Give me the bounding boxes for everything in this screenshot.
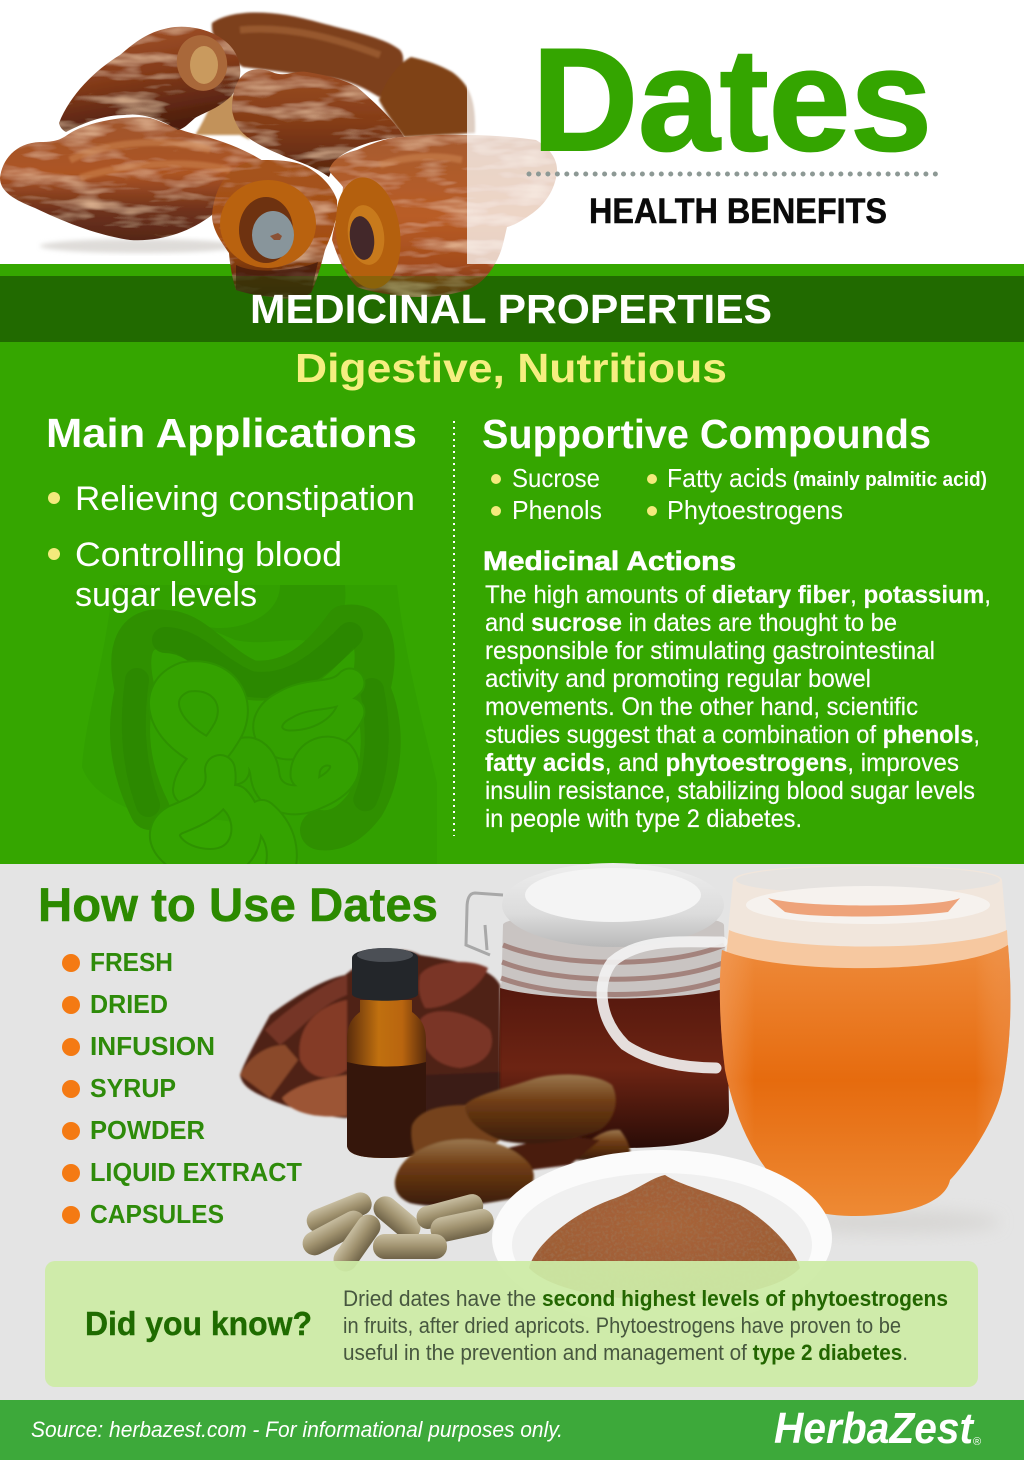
bullet: controlling blood sugar levels: sugar levels bbox=[75, 576, 257, 614]
large intestine bbox=[130, 624, 381, 830]
bullet: controlling blood sugar levels: Controlling blood bbox=[75, 536, 342, 574]
text block: medicinal actions: studies suggest that a combination of phenols, bbox=[485, 721, 980, 749]
jar glass ridges bbox=[501, 945, 726, 994]
callout text: useful in the prevention and management of type 2 diabetes. bbox=[343, 1340, 908, 1365]
text block: medicinal actions: activity and promoting regular bowel bbox=[485, 665, 871, 693]
bottle black cap bbox=[352, 948, 418, 1001]
centre date bbox=[232, 69, 404, 177]
callout text: Dried dates have the second highest levels of phytoestrogens bbox=[343, 1286, 948, 1311]
text block: medicinal actions: insulin resistance, stabilizing blood sugar levels bbox=[485, 777, 975, 805]
back dates (soft focus) bbox=[195, 12, 475, 140]
text block: medicinal actions: fatty acids, and phytoestrogens, improves bbox=[485, 749, 959, 777]
text block: medicinal actions: in people with type 2 diabetes. bbox=[485, 805, 802, 833]
date seed hole bbox=[190, 46, 218, 84]
cap top highlight bbox=[357, 948, 413, 962]
dark translucent band over lower dates bbox=[0, 276, 1024, 342]
table shadows bbox=[780, 1210, 1000, 1234]
callout heading: Did you know? bbox=[85, 1305, 312, 1342]
tea surface bbox=[746, 886, 990, 924]
heading: medicinal actions: Medicinal Actions bbox=[483, 546, 736, 576]
photo: pile of dates bbox=[0, 0, 1024, 342]
highlight on date skin bbox=[70, 143, 462, 178]
front date cavity bbox=[239, 197, 293, 263]
bullet: relieving constipation: Relieving constipation bbox=[75, 480, 415, 518]
text block: medicinal actions bbox=[485, 581, 991, 833]
green medicinal section background bbox=[0, 264, 1024, 864]
torso silhouette bbox=[82, 585, 437, 864]
item: syrup: SYRUP bbox=[90, 1073, 176, 1103]
item: infusion: INFUSION bbox=[90, 1031, 215, 1061]
right cut date bbox=[329, 135, 557, 297]
lower dark core of front date bbox=[236, 262, 318, 297]
list: forms of use bbox=[62, 947, 302, 1229]
right date seed bbox=[344, 203, 388, 267]
amber extract bottle bbox=[347, 948, 426, 1158]
dried date pile bbox=[240, 950, 500, 1120]
text block: medicinal actions: The high amounts of dietary fiber, potassium, bbox=[485, 581, 991, 609]
heading: how to use dates: How to Use Dates bbox=[38, 878, 438, 931]
cut end of upper date bbox=[171, 29, 233, 97]
bowl inner shade bbox=[512, 1173, 812, 1317]
text block: medicinal actions: responsible for stimulating gastrointestinal bbox=[485, 637, 935, 665]
source note: Source: herbazest.com - For informational purposes only. bbox=[31, 1417, 563, 1442]
syrup jar bbox=[466, 863, 729, 1148]
text block: medicinal actions: movements. On the other hand, scientific bbox=[485, 693, 918, 721]
bottle dark liquid bbox=[347, 1062, 426, 1158]
cut face of right date bbox=[329, 173, 407, 293]
column divider bbox=[453, 421, 455, 836]
title: Dates: Dates bbox=[532, 18, 932, 181]
compound: fatty acids: Fatty acids bbox=[667, 463, 787, 493]
front cut date bbox=[212, 160, 337, 299]
list: main applications bbox=[48, 480, 415, 614]
compound: sucrose: Sucrose bbox=[512, 463, 600, 493]
text block: medicinal actions: and sucrose in dates are thought to be bbox=[485, 609, 897, 637]
subheading: digestive, nutritious: Digestive, Nutritious bbox=[295, 345, 727, 391]
glass upper wall bbox=[726, 865, 1008, 950]
glass rim opening bbox=[736, 866, 1000, 894]
whole dates beside jar bbox=[395, 1075, 631, 1206]
bottle body bbox=[347, 1000, 426, 1158]
tea body bbox=[720, 945, 1010, 1216]
subtitle: health benefits: HEALTH BENEFITS bbox=[589, 192, 887, 231]
white fade panel over right of dates bbox=[467, 0, 567, 264]
powder mound bbox=[529, 1175, 800, 1300]
logo: HerbaZest: ® bbox=[973, 1436, 981, 1448]
item: powder: POWDER bbox=[90, 1115, 205, 1145]
bullet: controlling blood sugar levels bbox=[48, 536, 342, 614]
dotted title divider bbox=[529, 172, 936, 176]
callout text bbox=[343, 1286, 948, 1365]
capsules bbox=[298, 1189, 496, 1276]
callout background bbox=[45, 1261, 978, 1387]
bowl of date powder bbox=[492, 1150, 832, 1326]
tea side glow bbox=[720, 945, 1010, 1216]
front date grey seed bbox=[252, 211, 294, 259]
small intestine loops bbox=[164, 676, 350, 870]
jar syrup bbox=[498, 988, 729, 1148]
logo: HerbaZest: HerbaZest bbox=[774, 1404, 975, 1453]
shadow under dates bbox=[40, 239, 240, 253]
compound: phenols: Phenols bbox=[512, 495, 602, 525]
footer bar bbox=[0, 1400, 1024, 1460]
glass peach band bbox=[724, 930, 1010, 975]
item: capsules: CAPSULES bbox=[90, 1199, 224, 1229]
illustration: intestines in torso bbox=[110, 585, 401, 864]
compound: phytoestrogens: Phytoestrogens bbox=[667, 495, 843, 525]
compound: fatty acids bbox=[647, 463, 987, 493]
large left date bbox=[0, 117, 275, 240]
footer background bbox=[0, 1400, 1024, 1460]
dark green heading band bbox=[0, 276, 1024, 342]
tea surface tint bbox=[768, 898, 960, 916]
jar lid highlight bbox=[525, 868, 701, 922]
heading: medicinal properties: MEDICINAL PROPERTIES bbox=[250, 286, 772, 332]
list: supportive compounds bbox=[491, 463, 987, 525]
jar lid bbox=[502, 863, 724, 947]
stomach shape bbox=[200, 585, 345, 642]
glass of date infusion bbox=[602, 865, 1010, 1216]
item: liquid extract: LIQUID EXTRACT bbox=[90, 1157, 302, 1187]
upper left date bbox=[59, 27, 240, 132]
heading: main applications: Main Applications bbox=[46, 410, 417, 456]
gray usage section background bbox=[0, 864, 1024, 1400]
heading: supportive compounds: Supportive Compounds bbox=[482, 411, 931, 457]
white header background bbox=[0, 0, 1024, 264]
jar clamp wire bbox=[466, 893, 503, 955]
panel: did you know bbox=[45, 1261, 978, 1387]
glass handle bbox=[602, 942, 722, 1068]
jar glass body bbox=[498, 914, 729, 1148]
white bowl bbox=[492, 1150, 832, 1326]
front date flesh ring bbox=[220, 180, 316, 268]
compound: fatty acids: (mainly palmitic acid) bbox=[793, 469, 987, 491]
callout text: in fruits, after dried apricots. Phytoestrogens have proven to be bbox=[343, 1313, 901, 1338]
item: dried: DRIED bbox=[90, 989, 168, 1019]
item: fresh: FRESH bbox=[90, 947, 173, 977]
photo: date products bbox=[240, 863, 1010, 1326]
